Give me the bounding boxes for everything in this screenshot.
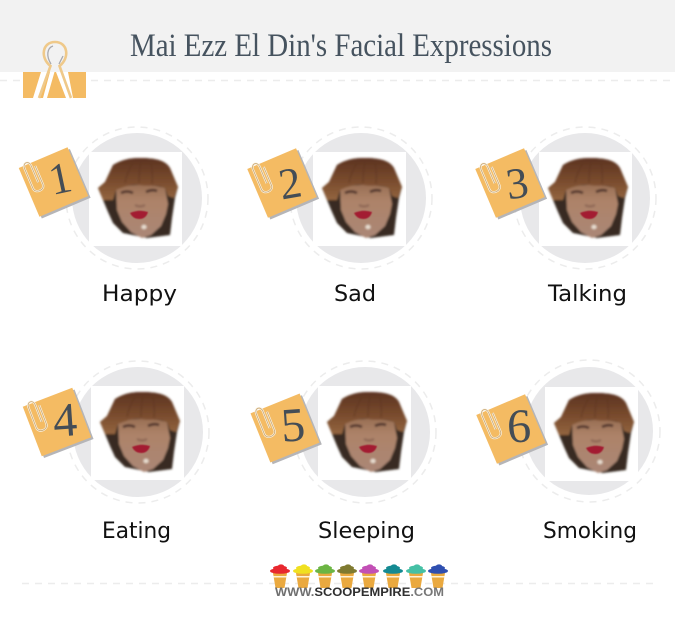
header band [0,0,675,72]
sticker 1: 1 [44,152,76,205]
sticker 6 [476,392,548,466]
label 6: Smoking [543,519,637,544]
photo circle 4 [67,361,209,503]
sticker 2 [247,146,319,220]
sticker 3 [475,146,547,220]
photo circle 2 [290,127,432,269]
panel: 4 Eating [22,361,209,544]
label 1: Happy [102,282,177,307]
sticker 5: 5 [279,398,307,453]
panel: 1 Happy [18,127,208,307]
sticker 5 [250,391,322,465]
label 5: Sleeping [318,519,415,544]
sticker 4: 4 [51,393,79,448]
sticker 3: 3 [503,158,531,209]
icon: ice cream cups [270,564,448,588]
icon: binder clip [23,42,86,98]
sticker 1 [18,145,91,219]
label 3: Talking [547,282,627,307]
panel: 6 Smoking [476,360,660,544]
photo circle 5 [294,361,436,503]
photo circle 6 [518,360,660,502]
sticker 6: 6 [506,400,532,453]
title: Mai Ezz El Din's Facial Expressions [130,28,552,64]
label 4: Eating [102,519,171,544]
photo circle 1 [66,127,208,269]
label 2: Sad [334,282,376,307]
photo circle 3 [514,127,656,269]
panel: 5 Sleeping [250,361,436,544]
logo text: WWW. SCOOPEMPIRE .COM [275,587,444,599]
logo: Scoop Empire [270,564,448,599]
sticker 4 [22,385,94,459]
panel: 3 Talking [475,127,656,307]
sticker 2: 2 [275,157,305,210]
panel: 2 Sad [247,127,432,307]
